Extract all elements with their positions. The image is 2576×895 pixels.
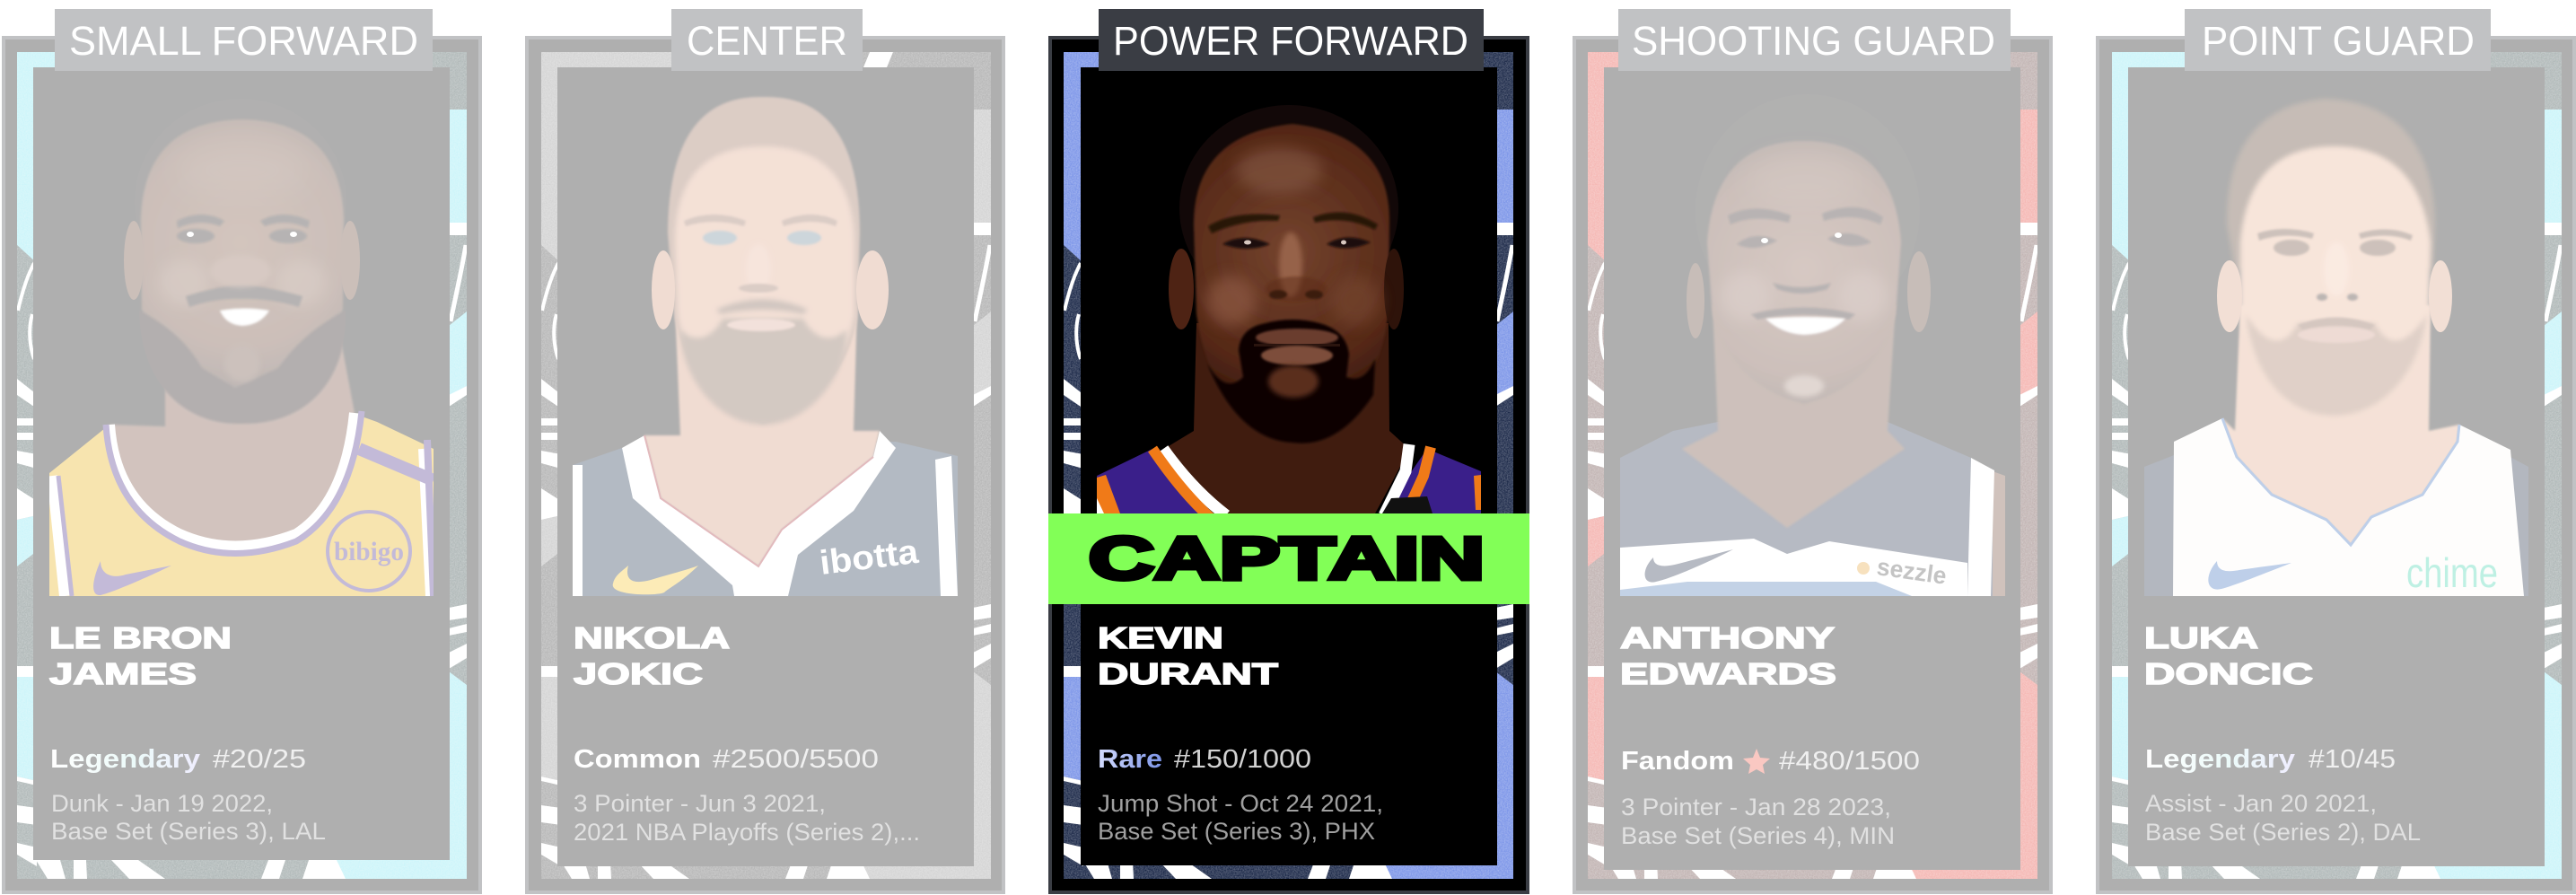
card: center	[527, 9, 1003, 892]
card: shooting guard	[1574, 9, 2051, 892]
player photo: LeBron James: bibigo	[334, 537, 404, 566]
moment details: 3 Pointer - Jun 3 2021,	[574, 790, 826, 817]
player name: DURANT	[1098, 657, 1278, 690]
player name: LE BRON	[49, 621, 232, 654]
player photo: Anthony Edwards: sezzle	[1875, 553, 1949, 590]
moment details	[2145, 790, 2421, 846]
rarity and serial: Legendary	[2145, 745, 2295, 774]
card: small forward	[4, 9, 480, 892]
player photo: Nikola Jokic	[573, 97, 958, 596]
player name: JAMES	[49, 657, 197, 690]
card art border	[1064, 52, 1513, 879]
position label: SHOOTING GUARD	[1632, 18, 1995, 64]
position label: SMALL FORWARD	[69, 18, 418, 64]
player photo: LeBron James	[49, 99, 434, 596]
moment details: Base Set (Series 3), PHX	[1098, 818, 1375, 845]
rarity and serial: #10/45	[2309, 745, 2396, 774]
player photo: Luka Doncic: chime	[2406, 549, 2498, 596]
info panel	[1081, 67, 1497, 865]
player name: ANTHONY	[1620, 621, 1835, 654]
rarity and serial	[50, 745, 306, 774]
card frame	[1574, 38, 2051, 892]
rarity and serial: #20/25	[213, 745, 306, 774]
info panel	[557, 67, 974, 866]
info panel	[33, 67, 450, 860]
position label: CENTER	[687, 18, 847, 64]
card art border	[17, 52, 467, 879]
captain banner	[1048, 513, 1529, 604]
card: power forward (captain)	[1048, 9, 1529, 892]
rarity and serial	[574, 745, 879, 774]
rarity and serial	[2145, 745, 2396, 774]
position label	[671, 9, 863, 71]
player name: NIKOLA	[574, 621, 730, 654]
card frame	[2098, 38, 2574, 892]
rarity and serial: Rare	[1098, 745, 1162, 774]
player name	[49, 621, 232, 690]
player photo: Anthony Edwards	[1620, 94, 2005, 596]
moment details	[1098, 790, 1383, 845]
rarity and serial	[1621, 747, 1920, 776]
moment details	[574, 790, 920, 846]
captain banner: CAPTAIN	[1089, 525, 1485, 592]
player name	[574, 621, 730, 690]
player photo: Kevin Durant	[1097, 105, 1481, 519]
info panel	[1604, 67, 2020, 870]
position label: POWER FORWARD	[1113, 18, 1468, 64]
rarity and serial: #150/1000	[1174, 745, 1311, 774]
moment details: 2021 NBA Playoffs (Series 2),...	[574, 819, 920, 846]
player name: DONCIC	[2144, 657, 2313, 690]
moment details: 3 Pointer - Jan 28 2023,	[1621, 794, 1891, 820]
rarity and serial: Fandom	[1621, 747, 1734, 776]
card art border	[2112, 52, 2562, 879]
player name: JOKIC	[574, 657, 703, 690]
rarity and serial: #2500/5500	[713, 745, 879, 774]
rarity and serial: Common	[574, 745, 701, 774]
player photo: Nikola Jokic: ibotta	[818, 533, 921, 583]
moment details: Dunk - Jan 19 2022,	[51, 790, 273, 817]
moment details	[1621, 794, 1895, 849]
info panel	[2128, 67, 2545, 866]
player name	[1620, 621, 1836, 690]
player name	[2144, 621, 2313, 690]
card art border	[1588, 52, 2037, 879]
player name	[1098, 621, 1278, 690]
player name: LUKA	[2144, 621, 2258, 654]
card: point guard	[2098, 9, 2574, 892]
position label	[2185, 9, 2491, 71]
rarity and serial: Legendary	[50, 745, 200, 774]
icon: star	[1743, 749, 1770, 774]
rarity and serial: #480/1500	[1779, 747, 1920, 776]
moment details: Base Set (Series 4), MIN	[1621, 822, 1895, 849]
position label	[55, 9, 433, 71]
card frame	[1050, 38, 1528, 892]
position label: POINT GUARD	[2202, 18, 2475, 64]
card frame	[4, 38, 480, 892]
moment details: Base Set (Series 3), LAL	[51, 818, 326, 845]
moment details: Base Set (Series 2), DAL	[2145, 819, 2421, 846]
moment details	[51, 790, 326, 845]
rarity and serial	[1098, 745, 1311, 774]
card frame	[527, 38, 1003, 892]
player name: KEVIN	[1098, 621, 1223, 654]
card art border	[541, 52, 991, 879]
moment details: Assist - Jan 20 2021,	[2145, 790, 2377, 817]
player name: EDWARDS	[1620, 657, 1836, 690]
player photo: Luka Doncic	[2144, 99, 2528, 596]
moment details: Jump Shot - Oct 24 2021,	[1098, 790, 1383, 817]
